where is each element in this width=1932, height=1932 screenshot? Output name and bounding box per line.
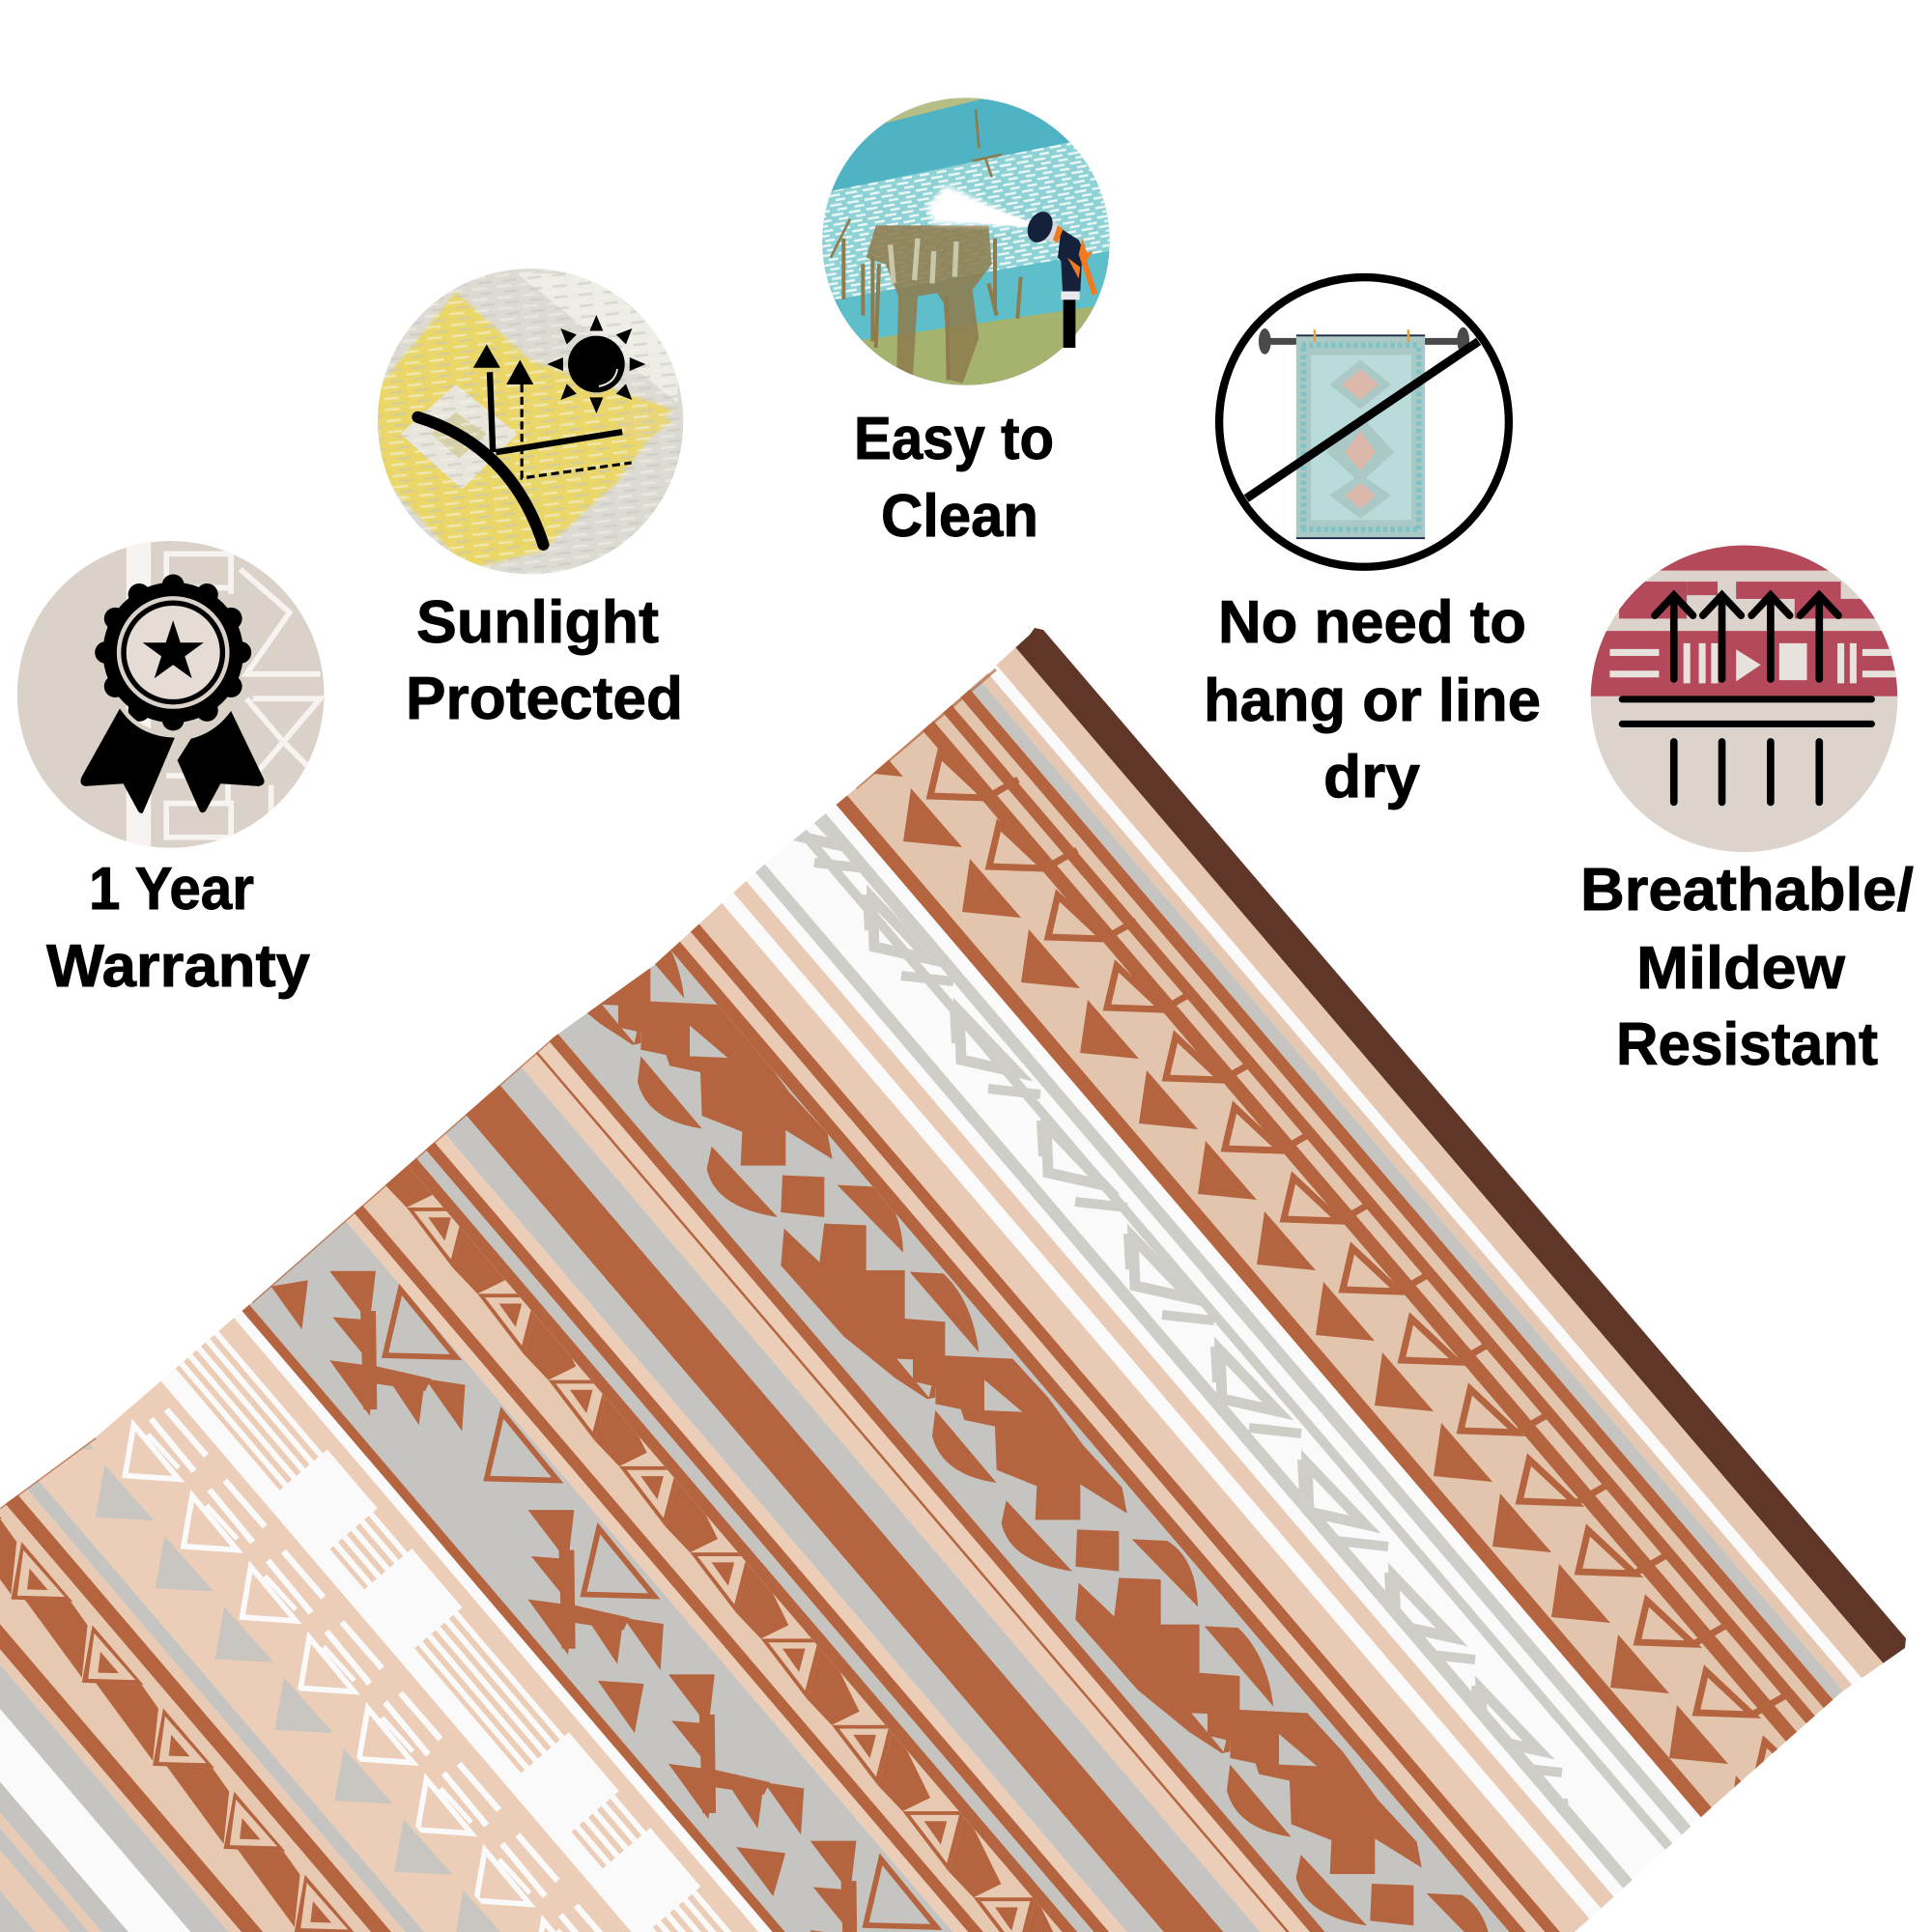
icon: no hanging to dry (1219, 277, 1509, 567)
rug photo (0, 559, 1932, 1932)
label: No need to hang or line dry (1204, 589, 1541, 810)
rug band: white motifs on beige (31, 1293, 674, 1932)
icon: 1 year warranty badge (13, 538, 332, 853)
label: Easy to Clean: Clean (881, 483, 1038, 550)
rug band: brown triangles (844, 718, 1902, 1856)
label: No need to hang or line dry: hang or line (1204, 668, 1541, 734)
label: Easy to Clean: Easy to (854, 406, 1054, 472)
label: No need to hang or line dry: No need to (1218, 589, 1526, 656)
rug stripes (0, 564, 1932, 1932)
rug band: grey triangle strip (36, 1394, 572, 1932)
label: Breathable/ Mildew Resistant: Mildew (1636, 935, 1846, 1002)
label: Easy to Clean (854, 406, 1054, 550)
rug band: large brown stepped shapes on grey (324, 645, 1867, 1932)
label: Sunlight Protected: Sunlight (416, 589, 659, 656)
label: No need to hang or line dry: dry (1323, 744, 1421, 810)
icon: breathable mildew resistant (1582, 538, 1909, 859)
label: Sunlight Protected (406, 589, 683, 732)
label: Breathable/ Mildew Resistant: Breathable/ (1580, 857, 1914, 923)
rug selvage edge (0, 669, 996, 1508)
label: 1 Year Warranty: 1 Year (89, 856, 254, 923)
rug band: nested triangles (265, 1035, 1072, 1932)
label: Sunlight Protected: Protected (406, 666, 683, 732)
rug band: lower triangles (0, 1459, 441, 1932)
label: 1 Year Warranty: Warranty (46, 933, 311, 1000)
label: 1 Year Warranty (46, 856, 311, 1000)
label: Breathable/ Mildew Resistant: Resistant (1616, 1011, 1878, 1078)
rug band: grey chevrons on white (611, 559, 1565, 1834)
label: Breathable/ Mildew Resistant (1580, 857, 1914, 1078)
rug band: brown figures on grey (271, 1271, 946, 1932)
icon: sunlight protection (370, 261, 690, 582)
icon: hose cleaning dirt from rug (821, 90, 1111, 396)
